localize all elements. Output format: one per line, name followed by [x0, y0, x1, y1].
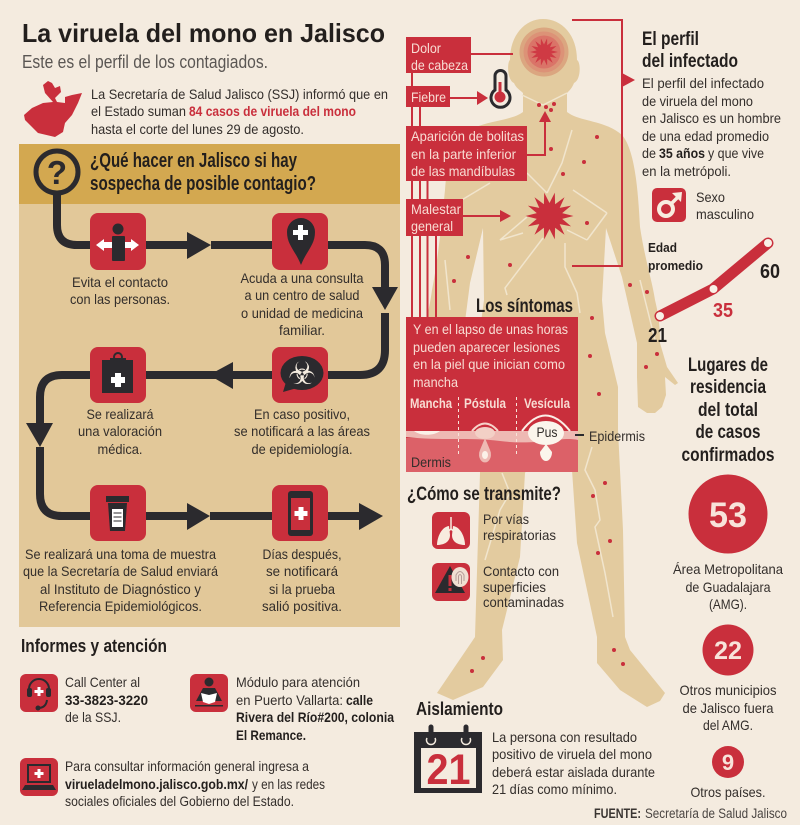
- icon: male sex: [652, 188, 686, 222]
- profile text: y que vive: [708, 145, 764, 161]
- panel: infected profile: [642, 29, 781, 222]
- icon: question mark: [36, 151, 78, 193]
- panel: what to do in Jalisco: [19, 144, 400, 627]
- chart: average age: [648, 239, 780, 347]
- transmission: surfaces: contaminadas: [483, 594, 564, 610]
- step: sample taken: Se realizará una toma de muestra: [25, 546, 216, 562]
- label: headache: [406, 37, 471, 73]
- step: medical assessment: médica.: [98, 441, 142, 457]
- stage: mancha: [414, 431, 440, 435]
- website: y en las redes: [252, 776, 325, 792]
- icon: thermometer: [491, 70, 510, 107]
- icon: headache rosette: [520, 28, 568, 76]
- panel heading: [90, 150, 316, 195]
- stat: 22: de Jalisco fuera: [682, 700, 774, 716]
- transmission: respiratory: Por vías: [483, 511, 529, 527]
- icon: calendar 21: [414, 727, 482, 794]
- chart: average age: promedio: [648, 258, 703, 273]
- lesion description: Y en el lapso de unas horas: [413, 321, 568, 337]
- panel header band: [19, 144, 400, 204]
- symptom leader lines: [412, 54, 545, 318]
- intro text: [91, 86, 388, 137]
- transmission: respiratory: [432, 511, 556, 549]
- label: swollen glands: Aparición de bolitas: [411, 128, 524, 144]
- step: results notified: [262, 485, 342, 614]
- step: go to a clinic: familiar.: [279, 322, 325, 338]
- Puerto Vallarta module: calle: [346, 692, 373, 708]
- stat: 22: 22: [714, 637, 742, 665]
- male label: masculino: [696, 206, 754, 222]
- transmission: surfaces: superficies: [483, 579, 546, 595]
- Puerto Vallarta module: en Puerto Vallarta:: [236, 692, 343, 708]
- panel heading: sospecha de posible contagio?: [90, 173, 316, 195]
- lesion description: en la piel que inician como: [413, 356, 565, 372]
- profile text: de: [642, 145, 656, 161]
- flow arrowheads: [26, 232, 398, 530]
- profile heading: [642, 29, 738, 72]
- profile text: El perfil del infectado: [642, 75, 764, 91]
- dermis label: Dermis: [411, 454, 451, 470]
- lesion description: pueden aparecer lesiones: [413, 339, 560, 355]
- step: sample taken: al Instituto de Diagnóstico y: [40, 581, 201, 597]
- step: results notified: se notificará: [266, 563, 338, 579]
- label: swollen glands: [406, 126, 527, 181]
- step: results notified: salió positiva.: [262, 598, 342, 614]
- label: headache: de cabeza: [411, 57, 468, 73]
- stage labels: [410, 395, 570, 411]
- icon: question mark: ?: [47, 154, 67, 191]
- residence heading: de casos: [696, 422, 760, 443]
- stage labels: Póstula: [464, 395, 506, 411]
- chart: average age: 21: [648, 325, 667, 347]
- male label: Sexo: [696, 189, 725, 205]
- panel: skin lesions: [406, 317, 578, 472]
- bracket to infected profile: [572, 20, 635, 266]
- step: medical assessment: Se realizará: [86, 406, 154, 422]
- profile heading: del infectado: [642, 51, 738, 72]
- stage: vesicula: [522, 416, 570, 461]
- icon: calendar 21: 21: [426, 746, 470, 794]
- call center: 33-3823-3220: [65, 692, 148, 708]
- step: results notified: Días después,: [262, 546, 342, 562]
- step: notify epidemiology: ☣: [288, 356, 316, 392]
- label: swollen glands: de las mandíbulas: [411, 163, 515, 179]
- stat: 53: Área Metropolitana: [673, 561, 783, 577]
- panel background: [19, 204, 400, 627]
- call center: de la SSJ.: [65, 709, 121, 725]
- stage: vesicula: Pus: [536, 424, 558, 440]
- call center: [20, 674, 148, 725]
- chart: average age: 60: [760, 261, 780, 283]
- profile text: 35 años: [659, 145, 705, 161]
- website: sociales oficiales del Gobierno del Estado.: [65, 793, 294, 809]
- epidermis: [406, 431, 578, 442]
- step: avoid contact: [70, 213, 170, 307]
- chart: average age: 35: [713, 300, 733, 322]
- intro text: hasta el corte del lunes 29 de agosto.: [91, 121, 304, 137]
- Puerto Vallarta module: [190, 674, 394, 743]
- step: go to a clinic: Acuda a una consulta: [240, 270, 364, 286]
- intro text: La Secretaría de Salud Jalisco (SSJ) informó que en: [91, 86, 388, 102]
- Puerto Vallarta module: Módulo para atención: [236, 674, 360, 690]
- website: virueladelmono.jalisco.gob.mx/: [65, 776, 248, 792]
- human body silhouette with lesions: [416, 19, 678, 707]
- intro text: 84 casos de viruela del mono: [189, 103, 356, 119]
- isolation text: deberá estar aislada durante: [492, 764, 655, 780]
- step: sample taken: Referencia Epidemiológicos.: [39, 598, 202, 614]
- lesion description: mancha: [413, 374, 458, 390]
- panel heading: ¿Qué hacer en Jalisco si hay: [90, 150, 298, 172]
- arrow: glands: [539, 111, 551, 122]
- stat: 53: 53: [709, 496, 747, 535]
- step: sample taken: que la Secretaría de Salud enviará: [23, 563, 218, 579]
- panel: places of residence: [673, 355, 783, 800]
- residence heading: residencia: [690, 377, 766, 398]
- call center: Call Center al: [65, 674, 140, 690]
- step: notify epidemiology: de epidemiología.: [252, 441, 352, 457]
- icon: chest burst: [526, 193, 574, 239]
- label: swollen glands: en la parte inferior: [411, 146, 516, 162]
- stat: 9: 9: [722, 750, 734, 775]
- label: fever: Fiebre: [411, 89, 446, 105]
- step: go to a clinic: o unidad de medicina: [241, 305, 363, 321]
- chart: average age: Edad: [648, 240, 677, 255]
- stage labels: Mancha: [410, 395, 452, 411]
- profile text: en Jalisco es un hombre: [642, 110, 781, 126]
- Puerto Vallarta module: El Remance.: [236, 727, 306, 743]
- stat: 53: (AMG).: [709, 596, 747, 612]
- Puerto Vallarta module: Rivera del Río#200, colonia: [236, 709, 394, 725]
- residence heading: confirmados: [682, 445, 774, 466]
- profile text: de viruela del mono: [642, 93, 753, 109]
- male label: [696, 189, 754, 222]
- step: notify epidemiology: En caso positivo,: [254, 406, 350, 422]
- isolation heading: Aislamiento: [416, 699, 503, 719]
- step: notify epidemiology: [234, 347, 370, 457]
- profile text: en la metrópoli.: [642, 163, 731, 179]
- transmission: surfaces: Contacto con: [483, 563, 559, 579]
- step: medical assessment: [78, 347, 162, 457]
- step: medical assessment: una valoración: [78, 423, 162, 439]
- epidermis label: Epidermis: [589, 428, 645, 444]
- profile text: de una edad promedio: [642, 128, 769, 144]
- stat: 9: [690, 746, 766, 800]
- transmission heading: ¿Cómo se transmite?: [407, 484, 561, 505]
- stat: 22: del AMG.: [703, 717, 753, 733]
- step: results notified: si la prueba: [269, 581, 335, 597]
- transmission: respiratory: respiratorias: [483, 527, 556, 543]
- label: general malaise: Malestar: [411, 201, 461, 217]
- label: general malaise: general: [411, 218, 453, 234]
- symptoms heading: Los síntomas: [476, 296, 573, 317]
- stat: 9: Otros países.: [690, 784, 766, 800]
- profile text: [642, 75, 781, 179]
- stat: 22: [680, 624, 776, 733]
- icon: map of Jalisco: [24, 81, 82, 137]
- title: La viruela del mono en Jalisco: [22, 18, 385, 48]
- stat: 53: de Guadalajara: [686, 579, 771, 595]
- flow connector lines: [40, 194, 385, 516]
- step: go to a clinic: a un centro de salud: [244, 287, 360, 303]
- website: [20, 758, 325, 809]
- step: go to a clinic: [240, 213, 364, 338]
- intro text: el Estado suman: [91, 103, 186, 119]
- lesion description: [413, 321, 568, 390]
- profile heading: El perfil: [642, 29, 699, 50]
- subtitle: Este es el perfil de los contagiados.: [22, 52, 268, 72]
- step: notify epidemiology: se notificará a las áreas: [234, 423, 370, 439]
- isolation text: La persona con resultado: [492, 729, 637, 745]
- label: headache: Dolor: [411, 40, 441, 56]
- panel: contact information: [20, 636, 394, 809]
- step: avoid contact: Evita el contacto: [72, 274, 168, 290]
- transmission: surfaces: [432, 563, 564, 610]
- stat: 53: [673, 474, 783, 612]
- residence heading: Lugares de: [688, 355, 768, 376]
- residence heading: [682, 355, 774, 466]
- arrow: malaise: [500, 210, 511, 222]
- step: avoid contact: con las personas.: [70, 291, 170, 307]
- source: [594, 806, 787, 821]
- source: FUENTE:: [594, 806, 641, 821]
- isolation text: positivo de viruela del mono: [492, 746, 652, 762]
- residence heading: del total: [698, 400, 758, 421]
- isolation text: 21 días como mínimo.: [492, 781, 617, 797]
- stage labels: Vesícula: [524, 395, 570, 411]
- label: general malaise: [406, 199, 463, 236]
- website: Para consultar información general ingresa a: [65, 758, 309, 774]
- dermis: [406, 438, 578, 472]
- stage: postula: [472, 424, 498, 462]
- arrow: fever: [477, 91, 488, 105]
- step: sample taken: [23, 485, 218, 614]
- contact heading: Informes y atención: [21, 636, 167, 656]
- stat: 22: Otros municipios: [680, 682, 776, 698]
- label: fever: [406, 86, 450, 107]
- isolation text: [492, 729, 655, 797]
